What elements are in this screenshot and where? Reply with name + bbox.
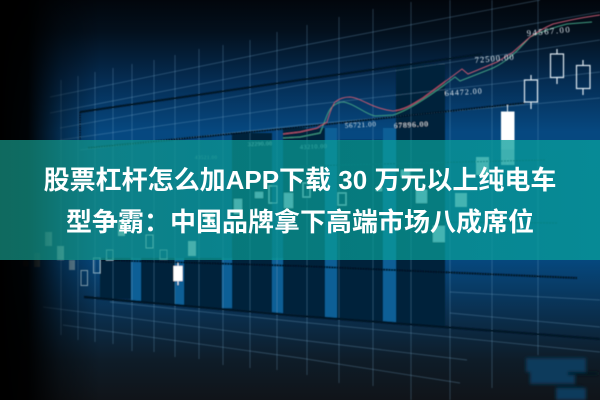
price labels: 56721.00 [345,120,377,130]
dark volume panels [100,64,445,327]
candlesticks upper right [524,49,590,109]
lighter volume columns [131,128,396,322]
price labels: 43521.00 [195,156,218,161]
title line 2: 型争霸：中国品牌拿下高端市场八成席位 [66,207,534,237]
dark trend lines [80,54,600,339]
price labels: 72500.00 [474,52,514,65]
candlesticks behind band [45,140,514,260]
price labels [195,24,570,161]
candlesticks lower left [23,250,182,286]
white candlestick [501,105,514,165]
moving average lines [283,15,600,138]
left dark fade [0,0,100,400]
title [44,165,556,237]
price labels: 94567.00 [526,24,570,38]
price labels: 67896.00 [394,120,429,130]
brush smudge bottom right [526,358,598,400]
title line 1: 股票杠杆怎么加APP下载 30 万元以上纯电车 [44,165,556,195]
price labels: 32290.00 [248,141,272,148]
price labels: 43210.00 [300,144,327,151]
teal title band [0,140,600,260]
dotted lines through band [300,160,558,223]
price labels: 64472.00 [445,86,482,98]
